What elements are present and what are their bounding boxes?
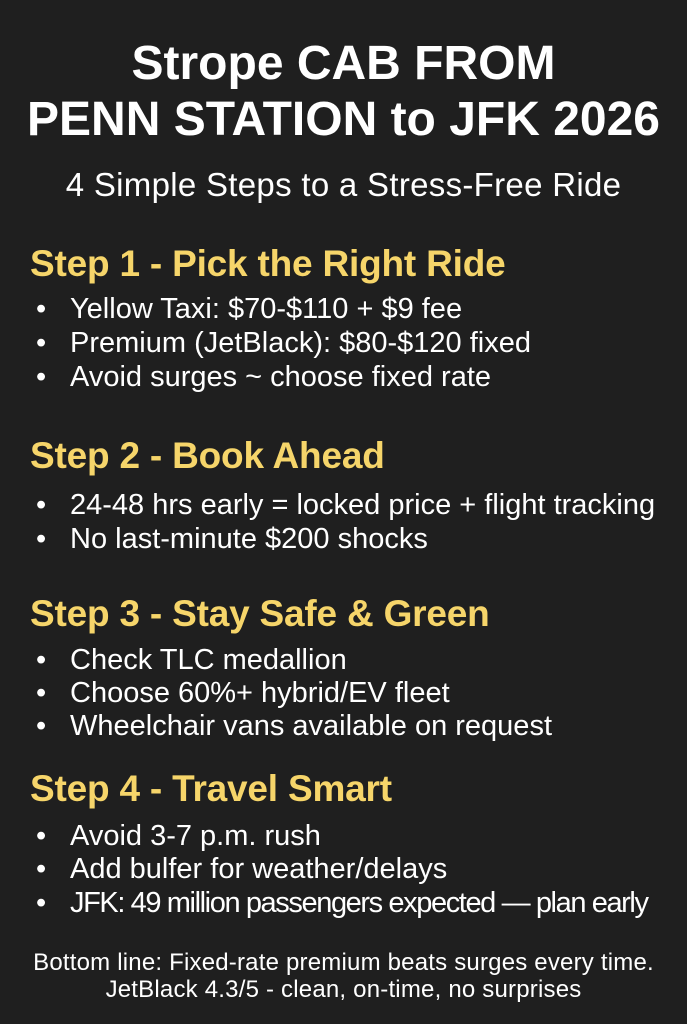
title: PENN STATION to JFK 2026 <box>27 93 660 146</box>
step 3 bullets <box>36 644 552 742</box>
step 3 bullets: • <box>36 644 46 676</box>
bottom line: JetBlack 4.3/5 - clean, on-time, no surprises <box>106 976 581 1003</box>
step 1 bullets: Yellow Taxi: $70-$110 + $9 fee <box>70 293 462 325</box>
step 3 bullets: Check TLC medallion <box>70 644 347 676</box>
title <box>27 37 660 146</box>
subtitle: 4 Simple Steps to a Stress-Free Ride <box>66 166 621 203</box>
step 3 bullets: • <box>36 710 46 742</box>
step 1 bullets: • <box>36 327 46 359</box>
step 3 bullets: Wheelchair vans available on request <box>70 710 552 742</box>
step 3 heading: Step 3 - Stay Safe & Green <box>30 593 490 634</box>
step 4 bullets: • <box>36 887 46 919</box>
step 4 heading: Step 4 - Travel Smart <box>30 768 392 809</box>
step 1 bullets: Avoid surges ~ choose fixed rate <box>70 361 491 393</box>
step 4 bullets: • <box>36 853 46 885</box>
step 1 bullets: • <box>36 293 46 325</box>
step 2 bullets <box>36 489 655 555</box>
step 2 bullets: 24-48 hrs early = locked price + flight tracking <box>70 489 655 521</box>
step 2 bullets: • <box>36 523 46 555</box>
title: Strope CAB FROM <box>132 37 555 90</box>
bottom line: Bottom line: Fixed-rate premium beats surges every time. <box>33 949 654 976</box>
step 2 bullets: • <box>36 489 46 521</box>
step 3 bullets: Choose 60%+ hybrid/EV fleet <box>70 677 450 709</box>
step 4 bullets: Add bulfer for weather/delays <box>70 853 447 885</box>
step 1 bullets <box>36 293 531 393</box>
step 4 bullets: • <box>36 820 46 852</box>
step 1 bullets: Premium (JetBlack): $80-$120 fixed <box>70 327 531 359</box>
step 1 heading: Step 1 - Pick the Right Ride <box>30 243 505 284</box>
step 2 bullets: No last-minute $200 shocks <box>70 523 428 555</box>
step 2 heading: Step 2 - Book Ahead <box>30 435 385 476</box>
step 1 bullets: • <box>36 361 46 393</box>
step 3 bullets: • <box>36 677 46 709</box>
bottom line <box>33 949 654 1003</box>
step 4 bullets <box>36 820 649 919</box>
step 4 bullets: JFK: 49 million passengers expected — plan early <box>70 887 648 919</box>
step 4 bullets: Avoid 3-7 p.m. rush <box>70 820 321 852</box>
